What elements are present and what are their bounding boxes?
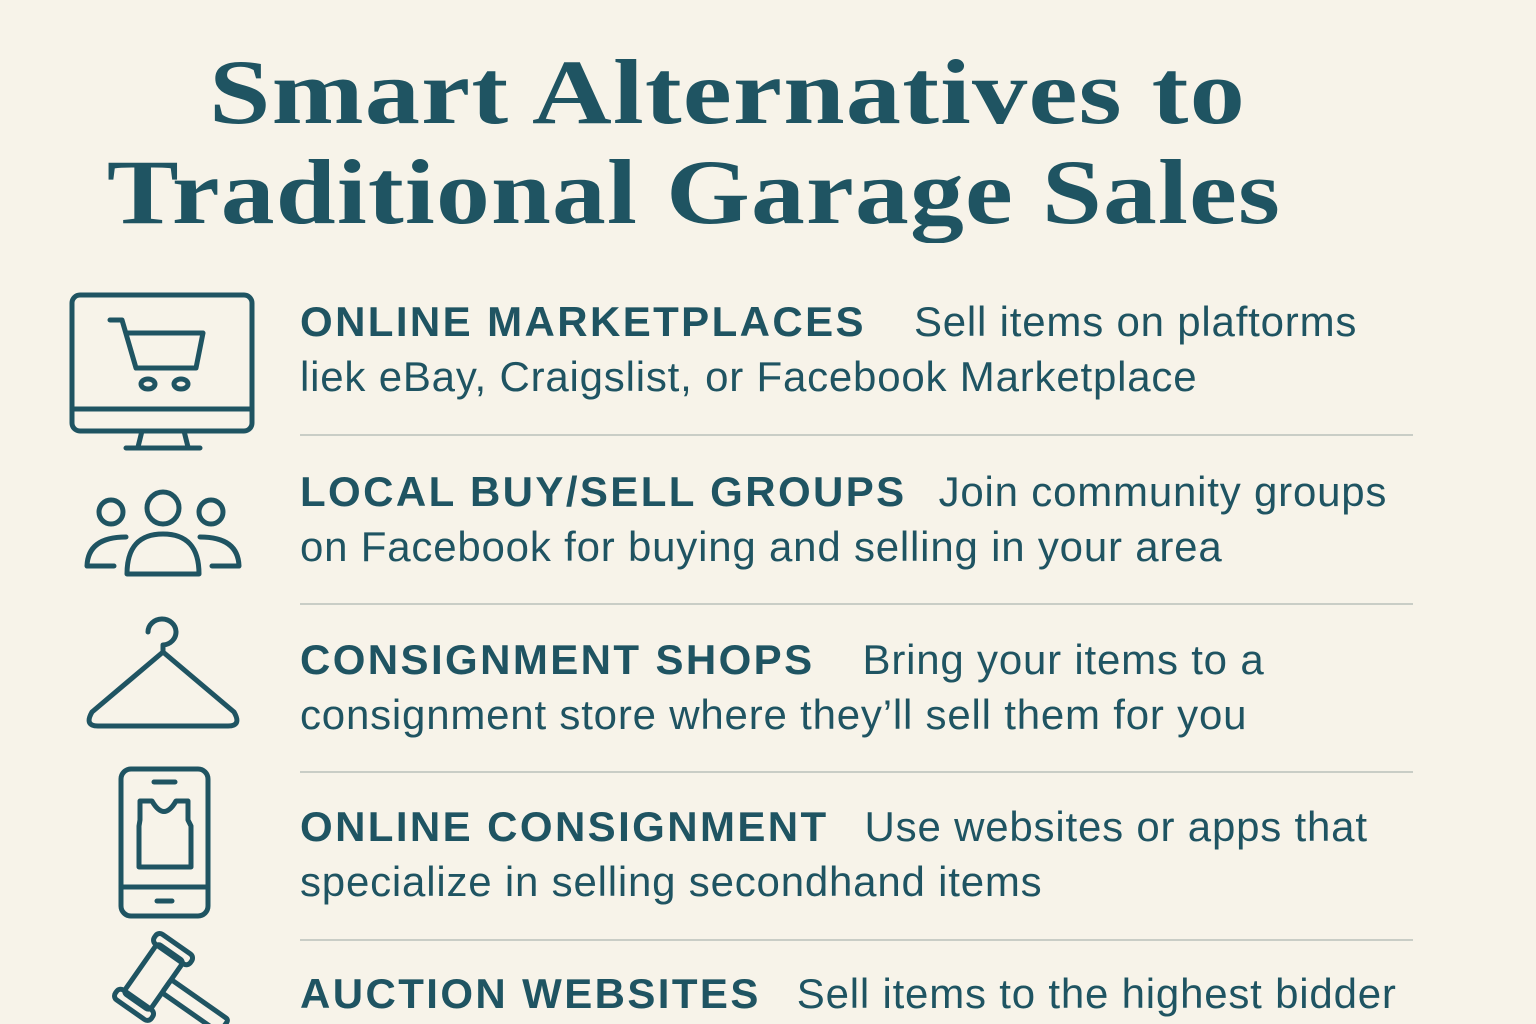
item: online consignment: specialize in selling secondhand items — [300, 858, 1042, 905]
item: auction websites: AUCTION WEBSITES Sell items to the highest bidder — [300, 970, 1397, 1017]
title: Traditional Garage Sales — [107, 141, 1281, 243]
item: local buy/sell groups: on Facebook for buying and selling in your area — [300, 523, 1222, 570]
icon: phone with shirt — [121, 769, 208, 916]
icon: monitor with cart — [72, 295, 252, 448]
icon: people — [87, 492, 239, 574]
icons — [70, 292, 254, 1024]
item: consignment shops: consignment store where they’ll sell them for you — [300, 691, 1247, 738]
item: consignment shops — [300, 636, 1264, 738]
icon: gavel — [113, 932, 247, 1024]
item: consignment shops: CONSIGNMENT SHOPS Bring your items to a — [300, 636, 1264, 683]
item: online marketplaces: ONLINE MARKETPLACES Sell items on plaftorms — [300, 298, 1357, 345]
item: local buy/sell groups: LOCAL BUY/SELL GROUPS Join community groups — [300, 468, 1387, 515]
title: Smart Alternatives to — [209, 41, 1246, 143]
item: online marketplaces: liek eBay, Craigslist, or Facebook Marketplace — [300, 353, 1197, 400]
item: online consignment: ONLINE CONSIGNMENT Use websites or apps that — [300, 803, 1368, 850]
item: online consignment — [300, 803, 1368, 905]
item: online marketplaces — [300, 298, 1357, 400]
icon: hanger — [89, 619, 237, 726]
title — [107, 41, 1281, 243]
item: local buy/sell groups — [300, 468, 1387, 570]
